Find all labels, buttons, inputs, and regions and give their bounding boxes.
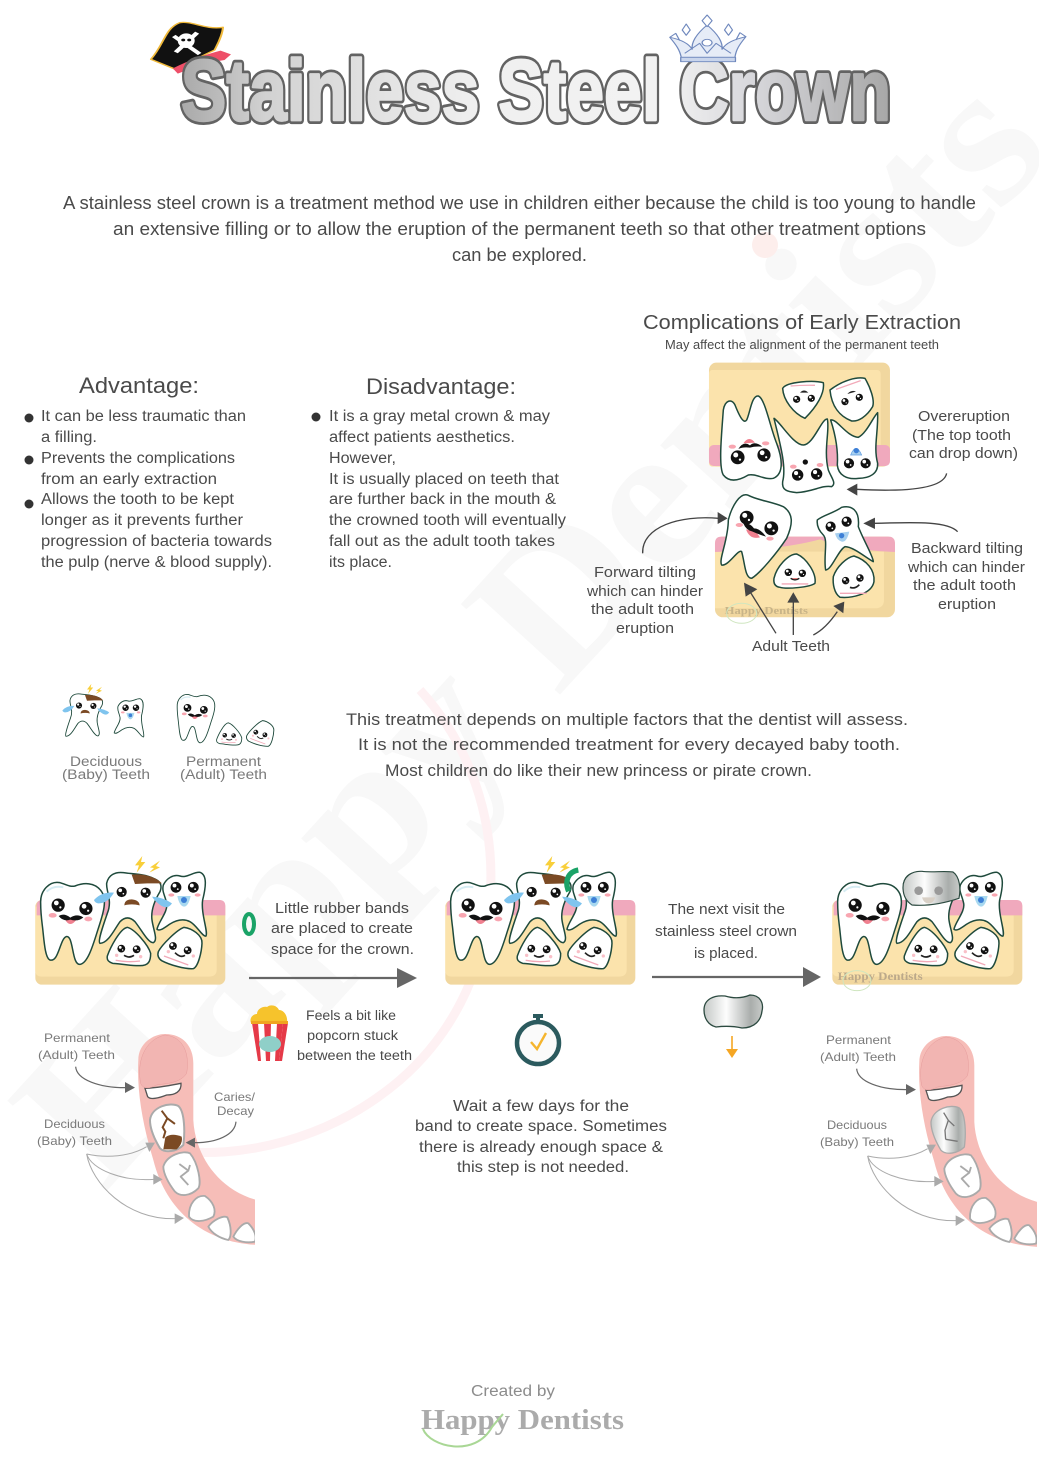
- logo: happy dentists: Happy Dentists: [421, 1404, 624, 1436]
- text: next visit: stainless steel crown: [655, 924, 797, 940]
- list: advantages: It can be less traumatic than: [41, 408, 246, 425]
- diagram: misaligned teeth: Happy Dentists: [725, 605, 808, 617]
- legend: deciduous teeth: [62, 684, 150, 782]
- labels: jaw decayed: Deciduous: [44, 1117, 105, 1131]
- label: adult teeth: Adult Teeth: [752, 639, 830, 655]
- list: disadvantages: It is usually placed on teeth that: [329, 471, 560, 488]
- subheading: complications: May affect the alignment of the permanent teeth: [665, 338, 939, 352]
- labels: jaw crowned: Deciduous: [827, 1118, 887, 1132]
- arrow: step 1 to 2: [249, 968, 417, 988]
- text: rubber bands: [271, 901, 414, 958]
- footer logo: [421, 1383, 624, 1447]
- label: overeruption: (The top tooth: [912, 428, 1011, 444]
- heading: disadvantage: Disadvantage:: [366, 374, 516, 399]
- timer icon: [517, 1014, 559, 1064]
- heading: advantage: Advantage:: [79, 373, 199, 398]
- text: popcorn: [297, 1008, 412, 1063]
- list: disadvantages: its place.: [329, 554, 392, 571]
- text: wait a few days: [415, 1098, 667, 1176]
- labels: jaw decayed: (Baby) Teeth: [37, 1134, 112, 1148]
- list: advantages: a filling.: [41, 429, 97, 446]
- legend: permanent teeth: [177, 694, 274, 782]
- text: next visit: [655, 902, 797, 962]
- list: disadvantages: However,: [329, 450, 396, 467]
- text: popcorn: popcorn stuck: [307, 1028, 398, 1043]
- label: backward tilting: the adult tooth: [913, 578, 1016, 594]
- labels: jaw crowned: Permanent: [826, 1033, 892, 1047]
- list: disadvantages: are further back in the mouth &: [329, 491, 557, 508]
- list: advantages: [24, 408, 272, 571]
- label: deciduous: (Baby) Teeth: [62, 767, 150, 782]
- text: next visit: The next visit the: [668, 902, 785, 918]
- panel: disadvantage: [312, 374, 566, 571]
- label: overeruption: Overeruption: [918, 409, 1010, 425]
- icon: crown: [670, 15, 746, 62]
- list: advantages: from an early extraction: [41, 471, 217, 488]
- label: forward tilting: eruption: [616, 621, 674, 637]
- scene 3: crown placed: Happy Dentists: [838, 970, 923, 983]
- icon: pirate hat: [151, 22, 231, 74]
- arrow: step 2 to 3: [652, 967, 821, 987]
- label: deciduous: Deciduous: [70, 754, 142, 769]
- label: forward tilting: Forward tilting: [594, 565, 696, 581]
- label: forward tilting: [586, 565, 703, 637]
- list: advantages: Allows the tooth to be kept: [41, 491, 235, 508]
- labels: jaw decayed: [37, 1031, 256, 1148]
- text: wait a few days: Wait a few days for the: [453, 1098, 629, 1115]
- label: forward tilting: which can hinder: [586, 584, 703, 600]
- text: wait a few days: there is already enough space &: [419, 1139, 664, 1156]
- label: backward tilting: eruption: [938, 597, 996, 613]
- heading: complications: Complications of Early Extraction: [643, 312, 961, 334]
- label: overeruption: can drop down): [909, 446, 1018, 462]
- labels: jaw crowned: [820, 1033, 896, 1149]
- text: next visit: is placed.: [694, 946, 758, 962]
- label: permanent: [180, 754, 267, 782]
- text: popcorn: between the teeth: [297, 1048, 412, 1063]
- list: advantages: the pulp (nerve & blood supply).: [41, 554, 272, 571]
- labels: jaw decayed: (Adult) Teeth: [38, 1048, 115, 1062]
- list: disadvantages: affect patients aesthetics.: [329, 429, 515, 446]
- arrow: backward tilting: [863, 518, 958, 532]
- intro paragraph: [63, 193, 976, 265]
- middle statement: It is not the recommended treatment for every decayed baby tooth.: [358, 736, 900, 754]
- list: advantages: longer as it prevents further: [41, 512, 243, 529]
- labels: jaw decayed: Decay: [217, 1104, 254, 1118]
- jaw diagram: crowned: [857, 1036, 1039, 1247]
- list: disadvantages: the crowned tooth will eventually: [329, 512, 566, 529]
- scene 1: decayed tooth: [35, 856, 225, 985]
- list: disadvantages: It is a gray metal crown & may: [329, 408, 550, 425]
- list: advantages: Prevents the complications: [41, 450, 235, 467]
- label: permanent: Permanent: [186, 754, 261, 769]
- intro paragraph: an extensive filling or to allow the eruption of the permanent teeth so that other treatment options: [113, 219, 926, 239]
- text: popcorn: Feels a bit like: [306, 1008, 396, 1023]
- label: permanent: (Adult) Teeth: [180, 767, 267, 782]
- arrow: forward tilting: [643, 512, 728, 553]
- arrow: crown down: [726, 1036, 738, 1058]
- panel: complications: [586, 312, 1025, 655]
- text: rubber bands: are placed to create: [271, 921, 413, 937]
- label: backward tilting: [907, 541, 1025, 613]
- labels: jaw crowned: (Baby) Teeth: [820, 1135, 894, 1149]
- text: wait a few days: this step is not needed.: [457, 1159, 629, 1176]
- middle statement: This treatment depends on multiple factors that the dentist will assess.: [346, 711, 908, 729]
- label: overeruption: [909, 409, 1018, 462]
- arrows: adult teeth: [744, 583, 844, 635]
- panel: advantage: [24, 373, 272, 571]
- text: created by: Created by: [471, 1383, 555, 1400]
- icon: rubber band: [244, 914, 254, 934]
- middle statement: Most children do like their new princess or pirate crown.: [385, 762, 812, 780]
- icon: popcorn: [250, 1005, 288, 1061]
- intro paragraph: can be explored.: [452, 245, 587, 265]
- text: wait a few days: band to create space. Sometimes: [415, 1118, 667, 1135]
- scene 3: crown placed: [832, 871, 1022, 991]
- jaw diagram: decayed: [76, 1034, 259, 1245]
- labels: jaw crowned: (Adult) Teeth: [820, 1050, 896, 1064]
- icon: adult teeth: [177, 694, 274, 746]
- label: backward tilting: which can hinder: [907, 560, 1025, 576]
- text: rubber bands: space for the crown.: [271, 942, 414, 958]
- intro paragraph: A stainless steel crown is a treatment method we use in children either because the child is too young to handle: [63, 193, 976, 213]
- list: disadvantages: fall out as the adult tooth takes: [329, 533, 555, 550]
- icon: baby teeth: [62, 684, 144, 737]
- scene 2: rubber band placed: [445, 856, 635, 985]
- labels: jaw decayed: Caries/: [214, 1090, 256, 1104]
- list: disadvantages: [312, 408, 566, 571]
- arrow: overeruption: [847, 473, 947, 496]
- icon: steel crown: [704, 995, 762, 1028]
- label: deciduous: [62, 754, 150, 782]
- middle statement: [346, 711, 908, 780]
- diagram: misaligned teeth: [709, 363, 895, 623]
- labels: jaw decayed: Permanent: [44, 1031, 111, 1045]
- list: advantages: progression of bacteria towards: [41, 533, 272, 550]
- text: rubber bands: Little rubber bands: [275, 901, 409, 917]
- label: backward tilting: Backward tilting: [911, 541, 1023, 557]
- label: forward tilting: the adult tooth: [591, 602, 694, 618]
